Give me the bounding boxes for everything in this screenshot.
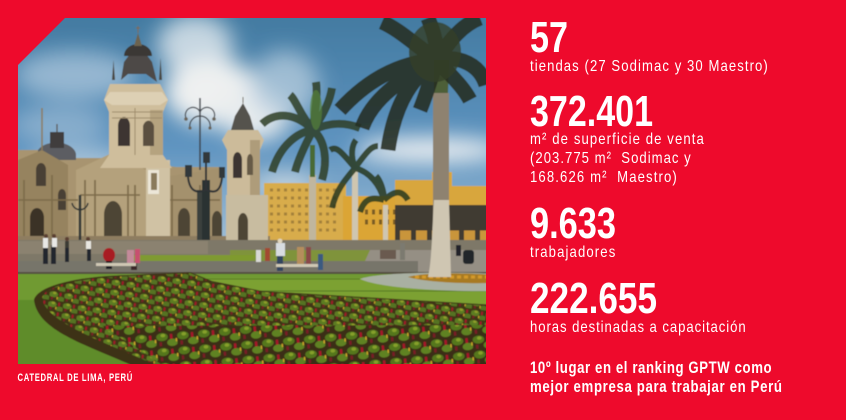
small palms behind [330,140,408,248]
street lamp [71,98,226,240]
stat: 9.633 trabajadores [530,199,616,261]
photo: Catedral de Lima [18,18,486,364]
stat: 57 tiendas [530,13,768,75]
plaza and pavement [8,240,496,276]
stat: 9.633 trabajadores: trabajadores [530,244,615,261]
ranking note [530,359,782,396]
sky with clouds [18,18,486,237]
stat: 57 tiendas: tiendas (27 Sodimac y 30 Maestro) [530,58,768,75]
stat: 372.401 m2 [530,87,705,186]
cathedral [8,26,270,248]
stat: 9.633 trabajadores: 9.633 [530,199,616,248]
caption: CATEDRAL DE LIMA, PERÚ [18,371,132,384]
flower ring around palm [360,273,496,291]
ranking note: mejor empresa para trabajar en Perú [530,378,782,396]
stat: 222.655 horas [530,274,746,336]
stat: 222.655 horas: horas destinadas a capacitación [530,319,746,336]
stat: 57 tiendas: 57 [530,13,568,62]
right tower [222,97,268,247]
central palm [262,82,360,260]
people on the plaza [43,234,474,271]
left tower [100,26,172,168]
stat: 372.401 m2: m² de superficie de venta [530,131,705,148]
lawn [18,274,486,364]
stat: 372.401 m2: (203.775 m² Sodimac y [530,150,691,167]
flowerbed [34,272,486,364]
big royal palm [340,18,486,277]
stat: 372.401 m2: 168.626 m² Maestro) [530,169,677,186]
stat: 222.655 horas: 222.655 [530,274,657,323]
stat: 372.401 m2: 372.401 [530,87,653,136]
yellow buildings [264,171,486,241]
ranking note: 10º lugar en el ranking GPTW como [530,359,772,377]
